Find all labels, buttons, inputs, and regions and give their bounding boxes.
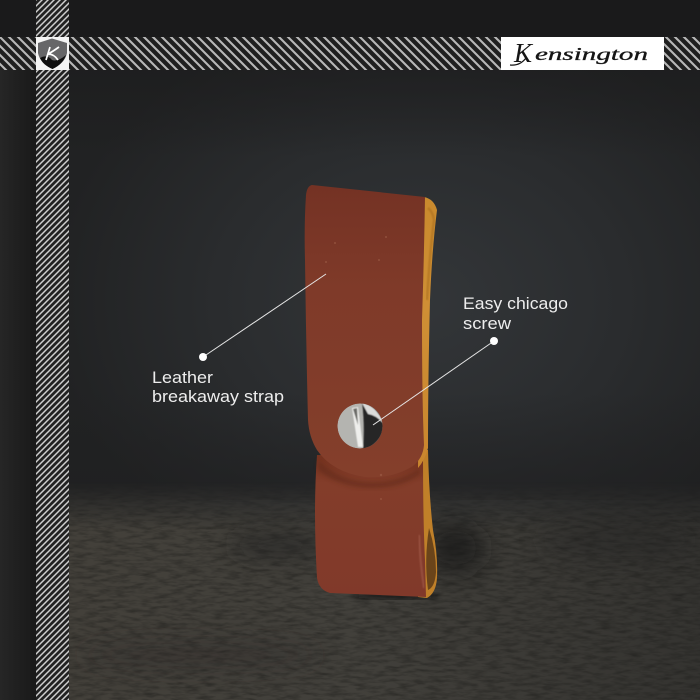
strap lower dark edge texture [426, 528, 436, 590]
strap upper tan edge texture [427, 208, 434, 300]
icon: Kensington shield logo [36, 37, 69, 70]
horizontal striped band [0, 37, 700, 70]
strap upper section [305, 185, 425, 477]
strap shadow [350, 593, 440, 599]
strap leather specks [325, 236, 387, 500]
top dark bar [0, 0, 700, 37]
strap lower highlight [419, 535, 424, 588]
product: leather strap [305, 185, 440, 599]
strap lower tan edge [418, 450, 437, 598]
callout: leather breakaway strap: breakaway strap [152, 388, 284, 406]
icon: chicago screw [338, 404, 382, 448]
logo: Kensington wordmark [501, 37, 664, 70]
callout: leather breakaway strap [152, 274, 326, 406]
vertical striped band [36, 0, 69, 700]
left dark column [0, 0, 36, 700]
callout: easy chicago screw: screw [463, 315, 511, 333]
concrete floor [69, 494, 700, 700]
logo: Kensington wordmark: K [513, 38, 534, 68]
strap flap shadow [318, 460, 420, 488]
strap lower section [315, 455, 426, 597]
callout: leather breakaway strap: Leather [152, 369, 214, 387]
strap upper tan edge [418, 197, 437, 468]
callout: easy chicago screw [373, 295, 573, 425]
logo: Kensington wordmark: ensington [535, 44, 648, 64]
callout: easy chicago screw: Easy chicago [463, 295, 568, 313]
